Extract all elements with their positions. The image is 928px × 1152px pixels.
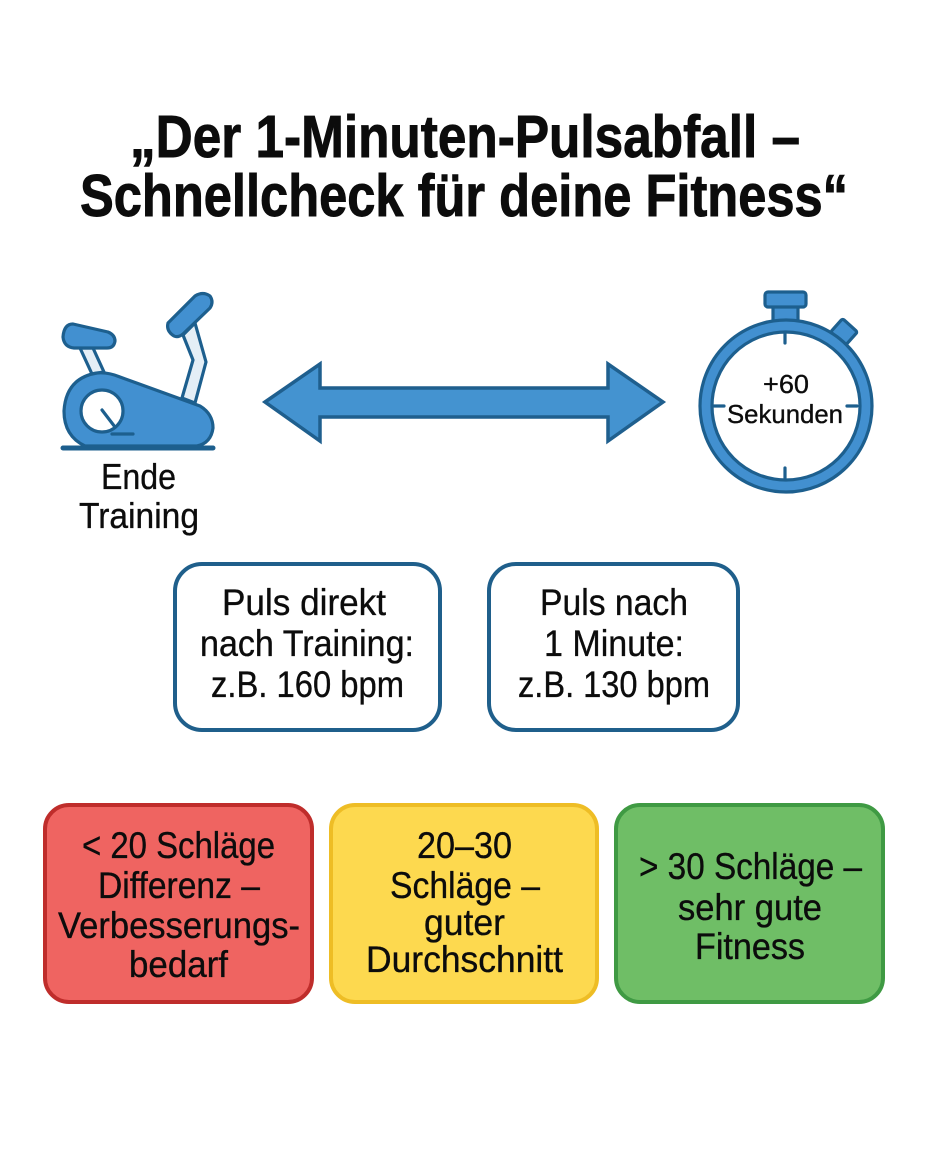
stopwatch text: +60 [763, 369, 809, 399]
panel: red rating [45, 805, 312, 1002]
panel: pulse after one minute: z.B. 130 bpm [518, 664, 710, 705]
icon: exercise bike [63, 294, 213, 448]
panel: red rating: Differenz – [98, 865, 260, 906]
panel: pulse directly after training: z.B. 160 bpm [211, 664, 404, 705]
label: Ende Training: Training [79, 495, 199, 536]
icon: stopwatch [700, 292, 872, 492]
panel: yellow rating: Durchschnitt [366, 939, 564, 980]
stopwatch text [727, 369, 843, 429]
panel: red rating: < 20 Schläge [82, 825, 275, 866]
panel: green rating: > 30 Schläge – [639, 846, 862, 887]
panel: green rating: sehr gute [678, 887, 822, 928]
panel: pulse directly after training: Puls direkt [222, 582, 387, 623]
panel: yellow rating [331, 805, 597, 1002]
panel: yellow rating: Schläge – [390, 865, 540, 906]
panel: pulse after one minute: 1 Minute: [544, 623, 684, 664]
arrow: double-headed [265, 364, 663, 441]
label: Ende Training [79, 456, 199, 536]
panel: green rating: Fitness [695, 926, 805, 967]
panel: pulse directly after training [175, 564, 440, 730]
panel: yellow rating: guter [424, 902, 505, 943]
panel: red rating: Verbesserungs- [58, 905, 300, 946]
panel: pulse after one minute [489, 564, 738, 730]
panel: yellow rating: 20–30 [417, 825, 512, 866]
panel: pulse after one minute: Puls nach [540, 582, 688, 623]
panel: red rating: bedarf [129, 944, 229, 985]
label: Ende Training: Ende [101, 456, 176, 497]
title: „Der 1-Minuten-Pulsabfall – [130, 104, 800, 170]
panel: green rating [616, 805, 883, 1002]
stopwatch text: Sekunden [727, 399, 843, 429]
panel: pulse directly after training: nach Training: [200, 623, 414, 664]
title [80, 104, 848, 229]
